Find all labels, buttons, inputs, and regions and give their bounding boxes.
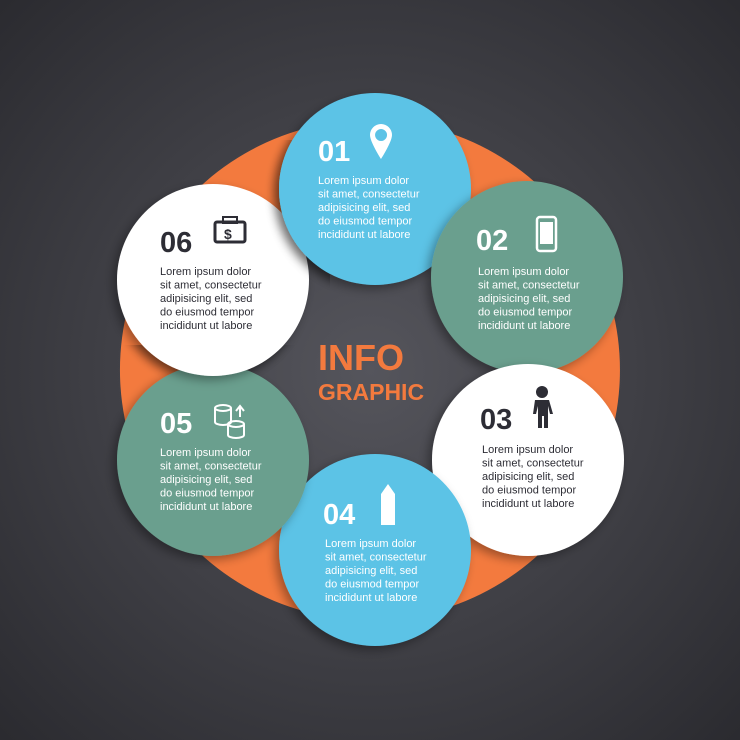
icon: phone bbox=[537, 217, 556, 251]
item 01: do eiusmod tempor bbox=[318, 216, 412, 228]
item 03: Lorem ipsum dolor bbox=[482, 444, 573, 456]
circle 06 bbox=[117, 184, 309, 376]
item 03: 03 bbox=[480, 404, 512, 436]
item 06: incididunt ut labore bbox=[160, 320, 252, 332]
icon: pencil bbox=[381, 484, 395, 525]
title: INFO GRAPHIC: GRAPHIC bbox=[318, 379, 424, 405]
circle 01 over 06 bbox=[269, 140, 330, 282]
item 06: sit amet, consectetur bbox=[160, 280, 262, 292]
item 01: incididunt ut labore bbox=[318, 229, 410, 241]
item 01: adipisicing elit, sed bbox=[318, 202, 410, 214]
item 02 bbox=[476, 217, 580, 332]
item 03: sit amet, consectetur bbox=[482, 458, 584, 470]
circle 03 bbox=[432, 364, 624, 556]
item 05: sit amet, consectetur bbox=[160, 460, 262, 472]
item 01: 01 bbox=[318, 136, 350, 168]
item 06: adipisicing elit, sed bbox=[160, 293, 252, 305]
circle 02 bbox=[431, 181, 623, 373]
item 03: do eiusmod tempor bbox=[482, 484, 576, 496]
circle 04 bbox=[279, 454, 471, 646]
circle 05 bbox=[117, 364, 309, 556]
item 01: sit amet, consectetur bbox=[318, 188, 420, 200]
title: INFO GRAPHIC: INFO bbox=[318, 337, 404, 378]
item 04 bbox=[323, 484, 427, 604]
title: INFO GRAPHIC bbox=[318, 337, 424, 405]
item 02: do eiusmod tempor bbox=[478, 306, 572, 318]
item 03 bbox=[480, 386, 584, 510]
item 06: do eiusmod tempor bbox=[160, 306, 254, 318]
item 04: adipisicing elit, sed bbox=[325, 565, 417, 577]
item 01: Lorem ipsum dolor bbox=[318, 175, 409, 187]
item 04: 04 bbox=[323, 499, 355, 531]
item 01 bbox=[318, 124, 420, 241]
icon: coins bbox=[215, 405, 244, 438]
item 03: adipisicing elit, sed bbox=[482, 471, 574, 483]
item 04: sit amet, consectetur bbox=[325, 552, 427, 564]
item 04: incididunt ut labore bbox=[325, 592, 417, 604]
item 05: adipisicing elit, sed bbox=[160, 474, 252, 486]
icon: pin bbox=[370, 124, 392, 159]
circle 06 over 05 bbox=[128, 345, 286, 385]
item 05: incididunt ut labore bbox=[160, 501, 252, 513]
item 04: do eiusmod tempor bbox=[325, 578, 419, 590]
item 05 bbox=[160, 405, 262, 513]
item 02: 02 bbox=[476, 225, 508, 257]
item 02: Lorem ipsum dolor bbox=[478, 266, 569, 278]
item 06 bbox=[160, 217, 262, 332]
item 06: Lorem ipsum dolor bbox=[160, 266, 251, 278]
item 02: incididunt ut labore bbox=[478, 320, 570, 332]
item 04: Lorem ipsum dolor bbox=[325, 538, 416, 550]
item 05: Lorem ipsum dolor bbox=[160, 447, 251, 459]
item 02: sit amet, consectetur bbox=[478, 280, 580, 292]
icon: briefcase: $ bbox=[224, 226, 232, 242]
circle 01 bbox=[279, 93, 471, 285]
icon: person bbox=[533, 386, 553, 428]
item 05: 05 bbox=[160, 408, 192, 440]
item 06: 06 bbox=[160, 227, 192, 259]
item 05: do eiusmod tempor bbox=[160, 488, 254, 500]
item 03: incididunt ut labore bbox=[482, 498, 574, 510]
orange ring bbox=[120, 120, 620, 620]
item 02: adipisicing elit, sed bbox=[478, 293, 570, 305]
